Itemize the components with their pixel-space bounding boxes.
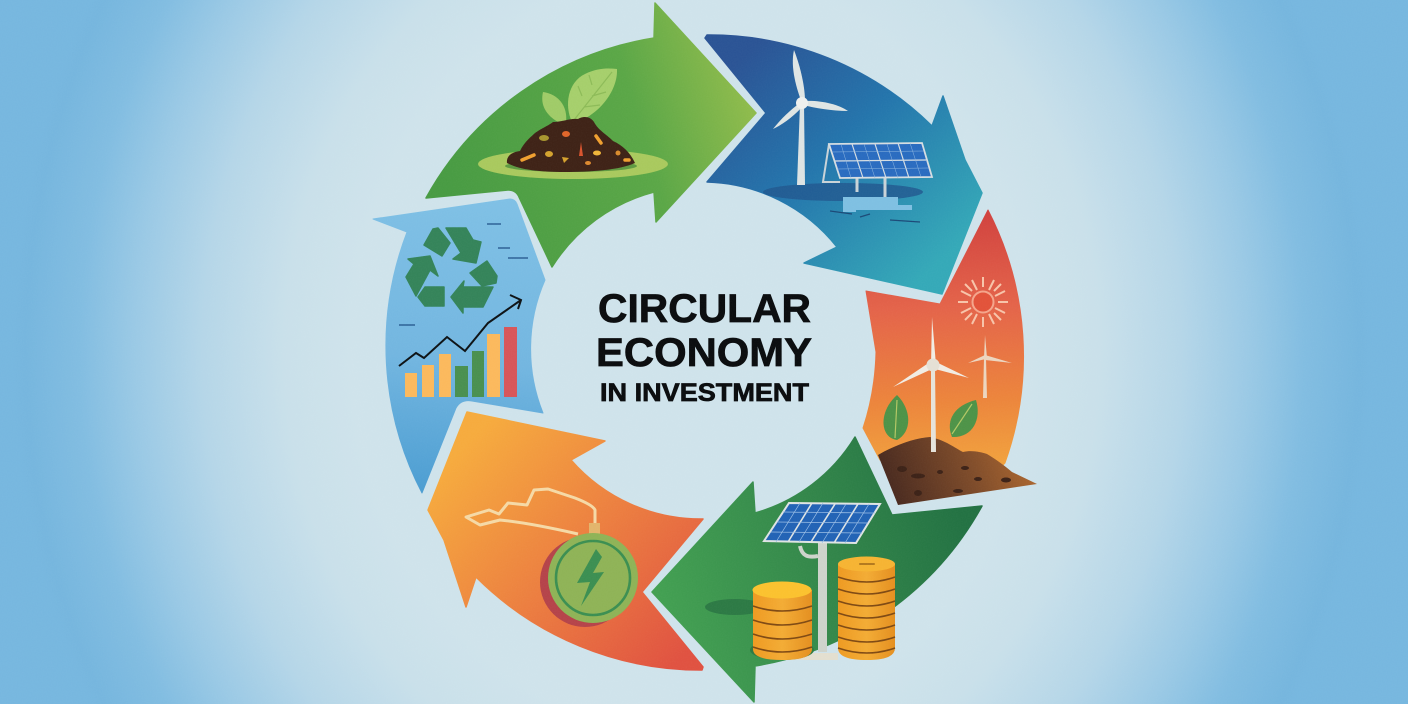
- panel: sky blue recycling arrow: [373, 199, 545, 493]
- icon: leaves: [883, 395, 978, 440]
- icon: left coin stack: [750, 582, 814, 660]
- icon: large turbine: [893, 317, 969, 452]
- panel: green compost arrow: [426, 3, 756, 267]
- panel: dark green solar investment arrow: [652, 437, 982, 702]
- heading line: economy: ECONOMY: [596, 331, 812, 375]
- icon: solar panel on pole: [705, 503, 880, 660]
- panel: orange battery arrow: [428, 412, 703, 670]
- icon: wind turbine and solar array: [763, 50, 932, 222]
- icon: battery coin: [540, 523, 638, 627]
- panel: blue renewable energy arrow: [705, 35, 982, 294]
- icon: soil mound: [878, 437, 1037, 505]
- heading line: circular: CIRCULAR: [598, 287, 811, 331]
- icon: sun: [958, 277, 1008, 327]
- icon: right coin stack: [838, 556, 895, 660]
- icon: bar chart with trend arrow: [399, 224, 528, 397]
- icon: charging cable: [466, 489, 595, 534]
- panel: red-orange wind and sun arrow: [863, 210, 1037, 505]
- subheading: IN INVESTMENT: [600, 379, 809, 407]
- title: [596, 287, 812, 407]
- icon: compost mound with sprout: [478, 69, 668, 179]
- icon: small turbine: [968, 335, 1012, 398]
- icon: recycling symbol: [406, 228, 497, 313]
